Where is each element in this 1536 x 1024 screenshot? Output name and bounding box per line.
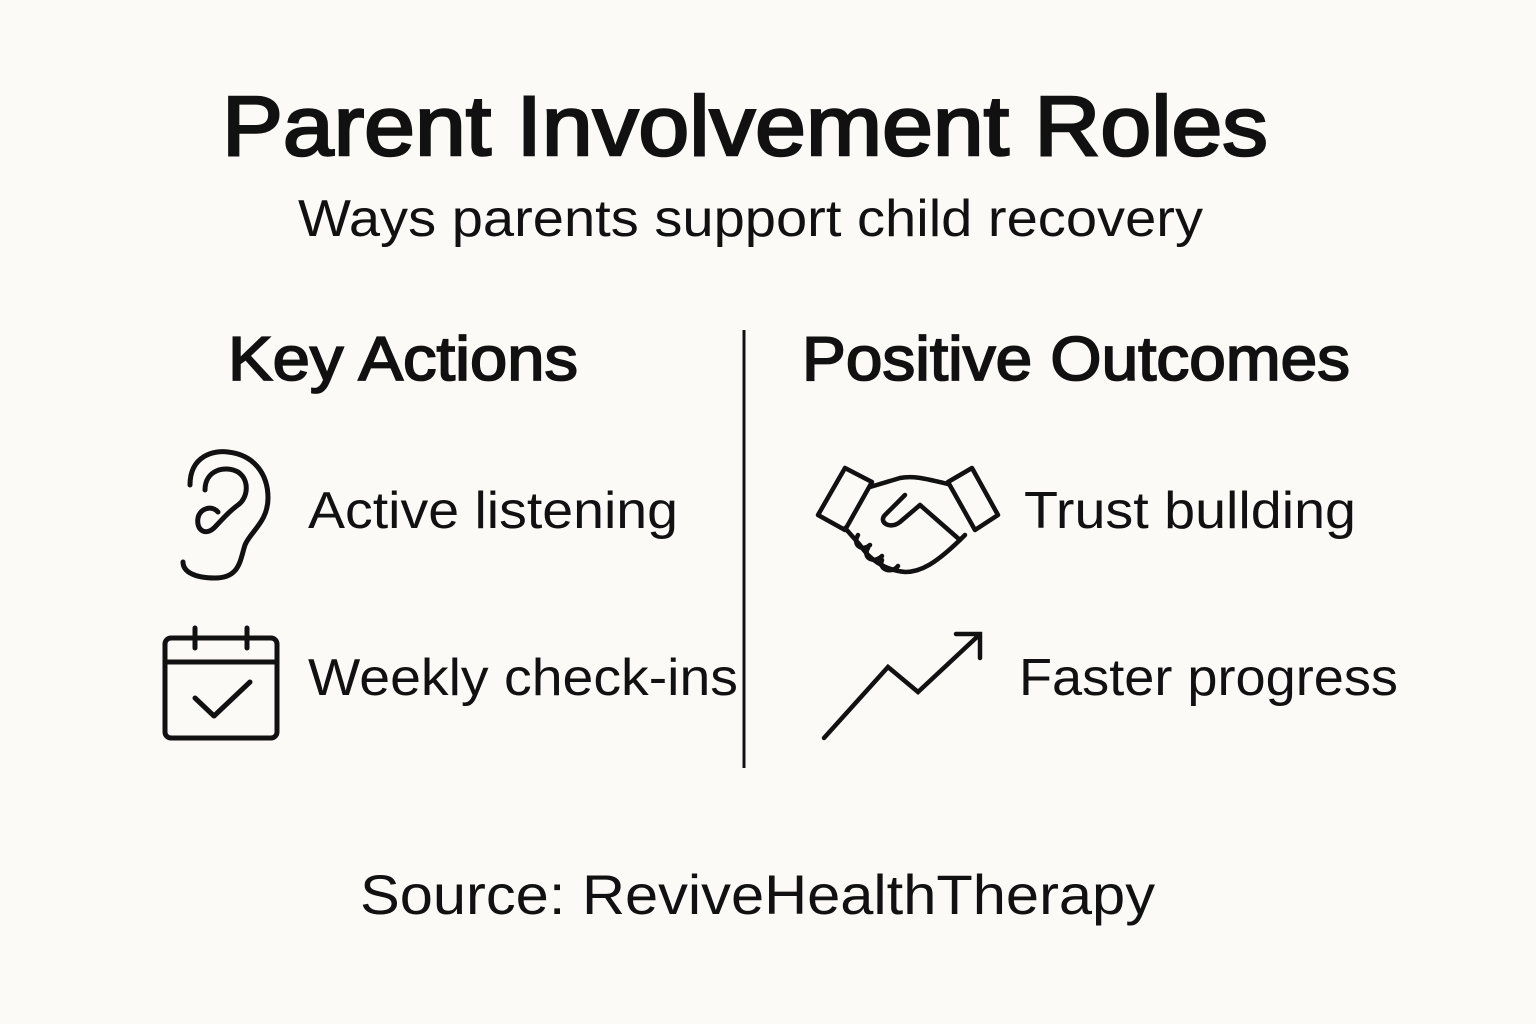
text: active listening: Active listening: [308, 482, 678, 540]
subtitle: Ways parents support child recovery: [298, 190, 1203, 248]
title: Parent Involvement Roles: [222, 79, 1268, 173]
source: Source: ReviveHealthTherapy: [360, 863, 1155, 926]
text: trust building: Trust bullding: [1024, 482, 1356, 540]
heading: key actions: Key Actions: [228, 325, 578, 394]
text: faster progress: Faster progress: [1019, 649, 1398, 707]
text: weekly check-ins: Weekly check-ins: [308, 649, 738, 707]
divider: [742, 330, 746, 768]
heading: positive outcomes: Positive Outcomes: [802, 325, 1350, 394]
icon: ear: [183, 452, 268, 578]
icon: handshake: [818, 468, 998, 572]
icon: calendar: [165, 628, 277, 738]
icon: rising arrow: [824, 634, 980, 738]
